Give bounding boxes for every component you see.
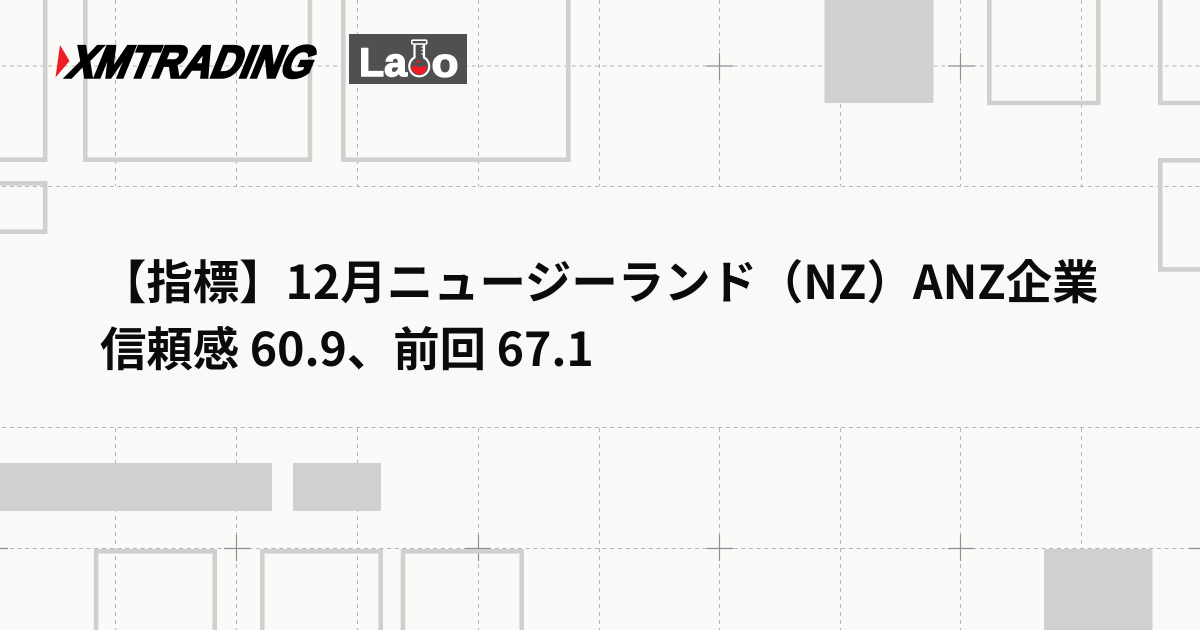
wordmark letter o: o [432,40,458,86]
title: 信頼感 60.9、前回 67.1 [100,313,594,380]
logo: Labo [349,34,467,86]
wordmark: XMTRADING [61,37,325,88]
title: 【指標】12月ニュージーランド（NZ）ANZ企業 [100,246,1099,313]
title [100,246,1099,380]
icon: flask [409,40,429,76]
icon: red chevron [56,45,70,78]
logo: XMTRADING [56,37,325,88]
title panel [52,187,1150,427]
wordmark letters La: La [359,41,408,85]
